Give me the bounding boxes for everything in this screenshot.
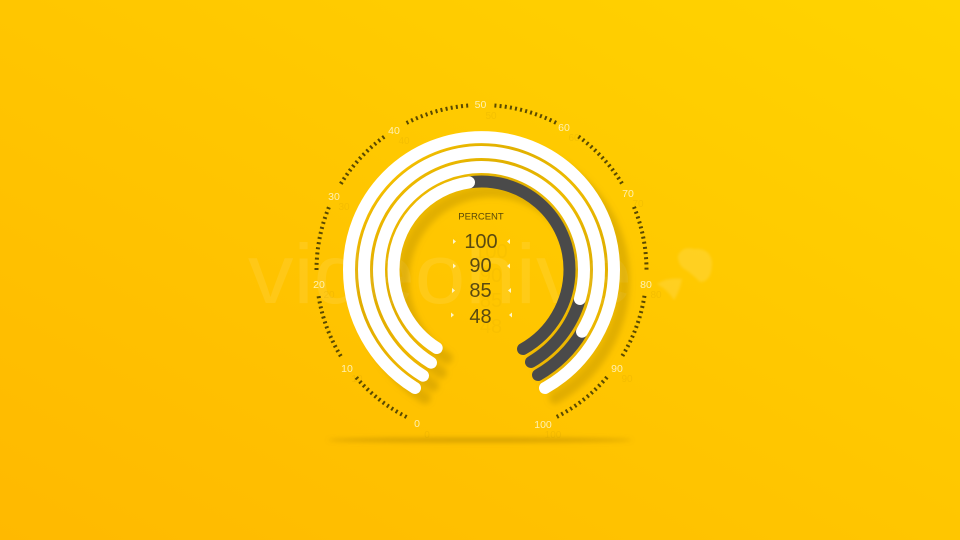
arc: 90 [364,152,599,376]
centre numbers [464,231,498,328]
ghost scale labels: 60 [568,133,580,144]
watermark logo [657,248,712,300]
centre numbers: 90 [469,255,492,277]
ghost centre numbers: 100 [474,241,508,263]
ghost centre numbers: 48 [480,316,502,338]
scale labels: 70 [622,188,634,200]
ring shadows [359,147,624,398]
watermark text: videohive [248,227,632,321]
floor shadow [328,438,632,442]
ghost scale labels: 20 [323,290,335,301]
arc: 100 [349,137,614,388]
scale labels: 30 [328,191,340,203]
scale labels: 90 [611,363,623,375]
arc: 48 [394,182,469,348]
scale labels: 10 [341,363,353,375]
tick marks [249,37,714,503]
ghost scale labels: 100 [545,430,562,441]
ghost scale labels: 70 [632,199,644,210]
ghost scale labels: 10 [351,374,363,385]
ghost centre numbers: 85 [480,290,502,312]
centre numbers: 100 [464,231,498,253]
ghost centre numbers: 90 [480,265,502,287]
row markers [451,239,512,318]
arc: 85 [379,167,584,363]
percent heading: PERCENT [458,212,504,222]
centre numbers: 48 [469,306,492,328]
ghost centre numbers [474,241,508,338]
scale labels [313,99,652,431]
ghost scale labels: 90 [621,374,633,385]
scale labels: 50 [475,99,486,111]
scale labels: 20 [313,279,325,291]
dark remainder arcs [469,182,582,375]
ghost scale labels: 30 [338,202,350,213]
scale labels: 0 [414,418,420,430]
scale labels: 100 [534,419,552,431]
ghost scale labels: 40 [398,136,410,147]
ghost scale labels: 50 [485,111,497,122]
centre numbers: 85 [469,280,492,302]
scale labels: 80 [640,279,652,291]
scale labels: 60 [558,122,570,134]
white value arcs [349,137,614,388]
ghost scale labels: 0 [424,430,430,441]
ghost scale labels: 80 [650,290,662,301]
ghost scale labels [323,111,662,441]
scale labels: 40 [388,125,400,137]
